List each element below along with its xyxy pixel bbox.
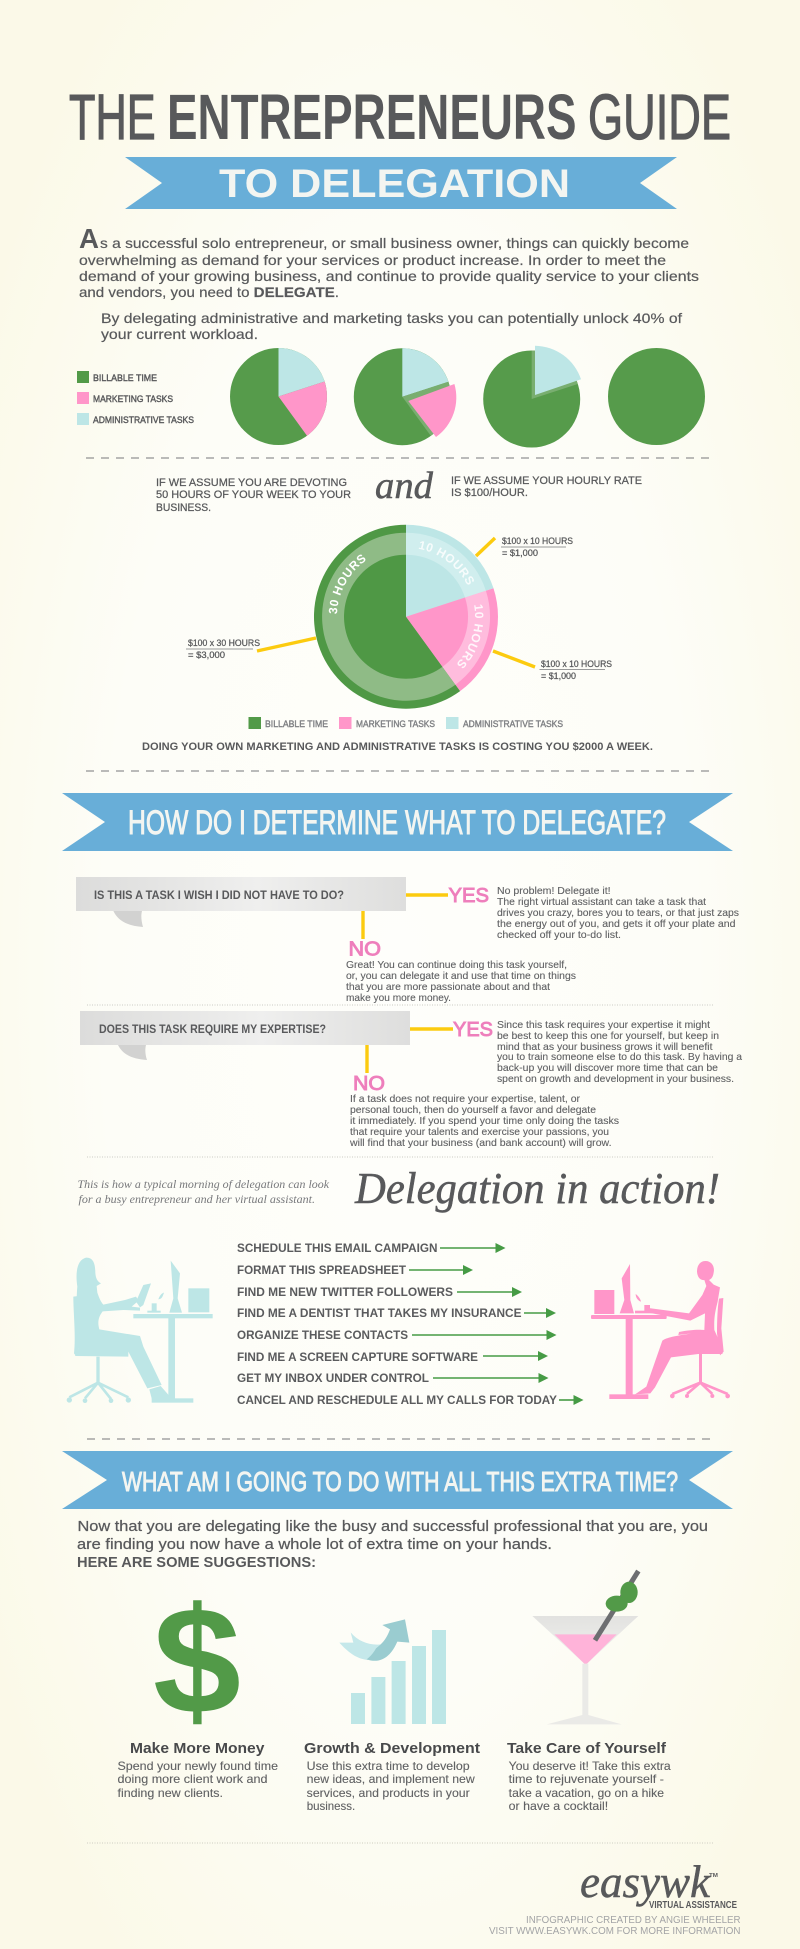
italic note: This is how a typical morning of delegation can look bbox=[78, 1177, 330, 1191]
suggestion: growth and development: services, and products in your bbox=[307, 1786, 470, 1800]
title: THE bbox=[69, 81, 156, 153]
task list with arrows bbox=[237, 1243, 584, 1407]
pie chart 2: marketing removed bbox=[354, 348, 456, 445]
legend: ring pie bbox=[248, 717, 563, 729]
question box 1: IS THIS A TASK I WISH I DID NOT HAVE TO DO? bbox=[94, 890, 344, 902]
assumption: 50 hours: IF WE ASSUME YOU ARE DEVOTING bbox=[156, 477, 347, 489]
intro paragraph: A bbox=[79, 223, 99, 254]
intro paragraph: s a successful solo entrepreneur, or small business owner, things can quickly become bbox=[100, 235, 689, 251]
ribbon: extra time bbox=[62, 1451, 733, 1509]
icon: martini bbox=[532, 1571, 638, 1724]
task 2: FORMAT THIS SPREADSHEET bbox=[237, 1265, 406, 1277]
yes 1 answer: drives you crazy, bores you to tears, or that just zaps bbox=[497, 907, 739, 919]
yes 2 answer: back-up you will discover more time that can be bbox=[497, 1062, 718, 1074]
yes 2 answer bbox=[497, 1019, 742, 1085]
assumption: 50 hours: BUSINESS. bbox=[156, 502, 211, 514]
suggestion: take care of yourself: Take Care of Yourself bbox=[507, 1740, 667, 1757]
no 2 answer bbox=[349, 1093, 619, 1149]
pie chart 3: admin removed bbox=[483, 346, 581, 448]
suggestions intro: are finding you now have a whole lot of extra time on your hands. bbox=[77, 1536, 552, 1553]
question box 2 bbox=[80, 1011, 410, 1060]
assumption: hourly rate: IF WE ASSUME YOUR HOURLY RATE bbox=[451, 475, 642, 487]
assumption: hourly rate bbox=[451, 475, 642, 499]
yes 1: YES bbox=[448, 885, 489, 907]
no 1 answer: make you more money. bbox=[346, 992, 451, 1004]
ribbon: to delegation: TO DELEGATION bbox=[219, 162, 570, 206]
no 2 answer: it immediately. If you spend your time only doing the tasks bbox=[350, 1115, 619, 1127]
callout line: admin: $100 x 10 HOURS bbox=[502, 536, 573, 546]
ring pie chart: hours bbox=[314, 524, 498, 709]
yes 1 answer bbox=[497, 885, 739, 941]
yes 1 answer: No problem! Delegate it! bbox=[497, 885, 611, 897]
no 1 answer: or, you can delegate it and use that time on things bbox=[346, 970, 576, 982]
yes 2 answer: you to train someone else to do this task. By having a bbox=[497, 1051, 742, 1063]
yes 2: YES bbox=[453, 1019, 493, 1041]
italic note bbox=[78, 1177, 330, 1206]
suggestions intro: Now that you are delegating like the busy and successful professional that you are, you bbox=[78, 1518, 708, 1535]
italic note: for a busy entrepreneur and her virtual assistant. bbox=[78, 1192, 315, 1206]
task 7 bbox=[237, 1373, 548, 1385]
no 1 answer: that you are more passionate about and that bbox=[346, 981, 550, 993]
legend: ring pie: MARKETING TASKS bbox=[356, 719, 435, 729]
callout line: billable bbox=[186, 638, 316, 660]
assumption: 50 hours bbox=[156, 477, 351, 514]
task 5 bbox=[237, 1330, 556, 1342]
title: ENTREPRENEURS bbox=[167, 81, 576, 153]
workload paragraph: your current workload. bbox=[101, 326, 258, 342]
yes 2 answer: spent on growth and development in your business. bbox=[497, 1073, 734, 1085]
no 2 answer: will find that your business (and bank account) will grow. bbox=[349, 1137, 612, 1149]
suggestion: make more money bbox=[118, 1740, 278, 1800]
no 1: NO bbox=[348, 938, 381, 960]
task 8: CANCEL AND RESCHEDULE ALL MY CALLS FOR TODAY bbox=[237, 1395, 557, 1407]
legend: task types: ADMINISTRATIVE TASKS bbox=[93, 415, 194, 425]
suggestion: take care of yourself: You deserve it! Take this extra bbox=[509, 1759, 671, 1773]
pie chart 4: all billable bbox=[608, 348, 705, 445]
logo: easywk: VIRTUAL ASSISTANCE bbox=[649, 1900, 737, 1911]
logo: easywk: easywk bbox=[580, 1856, 712, 1907]
workload paragraph bbox=[101, 310, 682, 342]
legend: task types: BILLABLE TIME bbox=[93, 373, 157, 383]
question box 1 bbox=[76, 877, 406, 927]
no 2 answer: that require your talents and exercise your passions, you bbox=[350, 1126, 609, 1138]
legend: task types bbox=[77, 371, 194, 425]
intro paragraph: overwhelming as demand for your services or product increase. In order to meet the bbox=[79, 252, 666, 268]
suggestion: make more money: finding new clients. bbox=[118, 1786, 223, 1800]
ring pie chart: hours: 30 HOURS bbox=[328, 554, 366, 614]
question box 2: DOES THIS TASK REQUIRE MY EXPERTISE? bbox=[99, 1024, 326, 1036]
legend: ring pie: ADMINISTRATIVE TASKS bbox=[463, 719, 563, 729]
yes 2 answer: mind that as your business grows it will benefit bbox=[497, 1041, 713, 1053]
suggestion: growth and development: Use this extra time to develop bbox=[307, 1759, 470, 1773]
task 1: SCHEDULE THIS EMAIL CAMPAIGN bbox=[237, 1243, 438, 1255]
intro paragraph: and vendors, you need to DELEGATE . bbox=[79, 284, 339, 300]
yes 1 answer: the energy out of you, and gets it off your plate and bbox=[497, 918, 736, 930]
icon: growth chart bbox=[339, 1619, 446, 1724]
icon: dollar sign: $ bbox=[153, 1576, 241, 1746]
yes 2 answer: be best to keep this one for yourself, but keep in bbox=[497, 1030, 719, 1042]
assumption: hourly rate: IS $100/HOUR. bbox=[451, 487, 528, 499]
task 3: FIND ME NEW TWITTER FOLLOWERS bbox=[237, 1287, 453, 1299]
suggestion: growth and development: Growth & Development bbox=[304, 1740, 480, 1757]
callout line: admin bbox=[476, 536, 573, 558]
yes 1 answer: The right virtual assistant can take a task that bbox=[497, 896, 706, 908]
icon: virtual assistant at desk bbox=[591, 1261, 730, 1399]
callout line: marketing: = $1,000 bbox=[541, 671, 576, 681]
no 2: NO bbox=[353, 1073, 385, 1095]
no 1 answer: Great! You can continue doing this task yourself, bbox=[346, 959, 567, 971]
suggestions intro: HERE ARE SOME SUGGESTIONS: bbox=[77, 1555, 316, 1571]
task 6: FIND ME A SCREEN CAPTURE SOFTWARE bbox=[237, 1352, 478, 1364]
task 4: FIND ME A DENTIST THAT TAKES MY INSURANCE bbox=[237, 1308, 522, 1320]
credits: INFOGRAPHIC CREATED BY ANGIE WHEELER bbox=[526, 1914, 741, 1926]
suggestion: take care of yourself bbox=[507, 1740, 671, 1813]
icon: entrepreneur at desk bbox=[67, 1258, 213, 1403]
no 2 answer: personal touch, then do yourself a favor and delegate bbox=[350, 1104, 596, 1116]
word: and: and bbox=[375, 465, 434, 507]
callout line: admin: = $1,000 bbox=[502, 548, 538, 558]
ribbon: how do I determine bbox=[62, 793, 733, 851]
cost statement: DOING YOUR OWN MARKETING AND ADMINISTRATIVE TASKS IS COSTING YOU $2000 A WEEK. bbox=[142, 741, 653, 753]
no 1 answer bbox=[346, 959, 576, 1004]
credits: VISIT WWW.EASYWK.COM FOR MORE INFORMATION bbox=[489, 1925, 740, 1937]
suggestion: growth and development bbox=[304, 1740, 480, 1813]
title: GUIDE bbox=[588, 81, 731, 153]
legend: ring pie: BILLABLE TIME bbox=[265, 719, 328, 729]
heading: delegation in action: Delegation in action! bbox=[354, 1164, 720, 1213]
ring pie chart: hours: 10 HOURS bbox=[458, 604, 484, 668]
pie chart 1: all three tasks bbox=[230, 348, 327, 445]
suggestion: take care of yourself: take a vacation, go on a hike bbox=[509, 1786, 664, 1800]
callout line: marketing bbox=[493, 651, 612, 681]
suggestion: make more money: Spend your newly found time bbox=[118, 1759, 278, 1773]
suggestion: make more money: doing more client work and bbox=[118, 1772, 268, 1786]
suggestion: growth and development: business. bbox=[307, 1799, 355, 1813]
workload paragraph: By delegating administrative and marketing tasks you can potentially unlock 40% of bbox=[101, 310, 682, 326]
task 5: ORGANIZE THESE CONTACTS bbox=[237, 1330, 408, 1342]
suggestion: take care of yourself: or have a cocktail! bbox=[509, 1799, 608, 1813]
suggestion: growth and development: new ideas, and implement new bbox=[307, 1772, 475, 1786]
ribbon: to delegation bbox=[125, 157, 677, 209]
callout line: billable: $100 x 30 HOURS bbox=[188, 638, 260, 648]
suggestions intro bbox=[77, 1518, 708, 1571]
question 1 bbox=[76, 877, 739, 1004]
credits bbox=[489, 1914, 741, 1937]
intro paragraph: demand of your growing business, and continue to provide quality service to your clients bbox=[79, 268, 699, 284]
question 2 bbox=[80, 1011, 742, 1149]
assumption: 50 hours: 50 HOURS OF YOUR WEEK TO YOUR bbox=[156, 489, 351, 501]
callout line: billable: = $3,000 bbox=[188, 650, 225, 660]
legend: task types: MARKETING TASKS bbox=[93, 394, 173, 404]
suggestion: make more money: Make More Money bbox=[130, 1740, 265, 1757]
yes 2 answer: Since this task requires your expertise it might bbox=[497, 1019, 710, 1031]
suggestion: take care of yourself: time to rejuvenate yourself - bbox=[509, 1772, 664, 1786]
task 7: GET MY INBOX UNDER CONTROL bbox=[237, 1373, 429, 1385]
callout line: marketing: $100 x 10 HOURS bbox=[541, 659, 612, 669]
no 2 answer: If a task does not require your expertise, talent, or bbox=[350, 1093, 580, 1105]
logo: easywk: TM bbox=[709, 1873, 718, 1879]
yes 1 answer: checked off your to-do list. bbox=[497, 929, 621, 941]
intro paragraph bbox=[79, 223, 699, 300]
ring pie chart: hours: 10 HOURS bbox=[418, 541, 474, 584]
